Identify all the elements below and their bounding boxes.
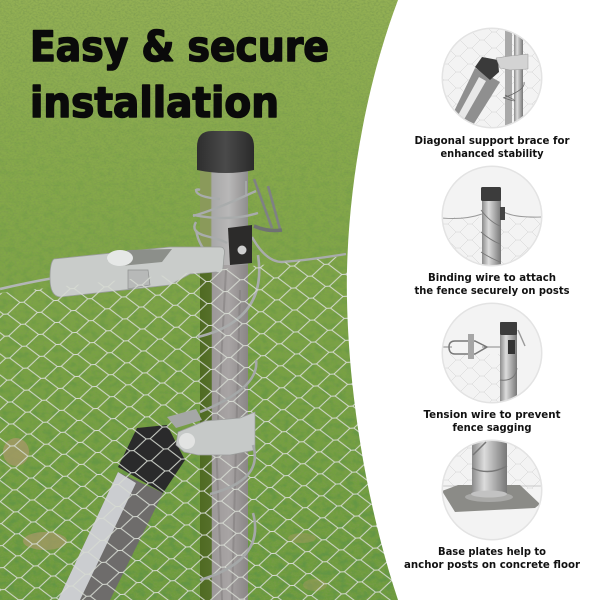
icon: tensioner close-up: [442, 302, 542, 404]
black wire clip: [228, 225, 252, 265]
title: Easy & secure: [30, 22, 329, 71]
feature: base plates: [404, 440, 581, 571]
brace sleeve: [118, 425, 185, 493]
fence post: [200, 170, 248, 600]
caption: Base plates help to: [438, 546, 546, 558]
diagonal brace tube: [58, 472, 163, 600]
caption: fence sagging: [452, 422, 532, 434]
caption: enhanced stability: [440, 148, 544, 160]
icon: post with binding wire: [442, 166, 542, 270]
feature: tension wire: [424, 302, 561, 434]
caption: the fence securely on posts: [414, 285, 570, 297]
caption: Diagonal support brace for: [414, 135, 570, 147]
caption: Binding wire to attach: [428, 272, 556, 284]
white side panel: [347, 0, 600, 600]
post cap: [197, 131, 254, 173]
caption: Tension wire to prevent: [424, 409, 561, 421]
title: installation: [30, 78, 279, 127]
brace clamp and spiral wires: [167, 360, 256, 580]
hexagonal wire netting: [0, 256, 400, 600]
feature: diagonal support brace: [414, 28, 570, 160]
binding wires at top of post: [0, 179, 346, 337]
tensioner: [50, 247, 224, 297]
title: [30, 22, 329, 127]
feature: binding wire: [414, 166, 570, 297]
caption: anchor posts on concrete floor: [404, 559, 581, 571]
icon: brace close-up: [442, 28, 542, 130]
grass background: [0, 0, 398, 600]
icon: base plate: [442, 440, 542, 540]
